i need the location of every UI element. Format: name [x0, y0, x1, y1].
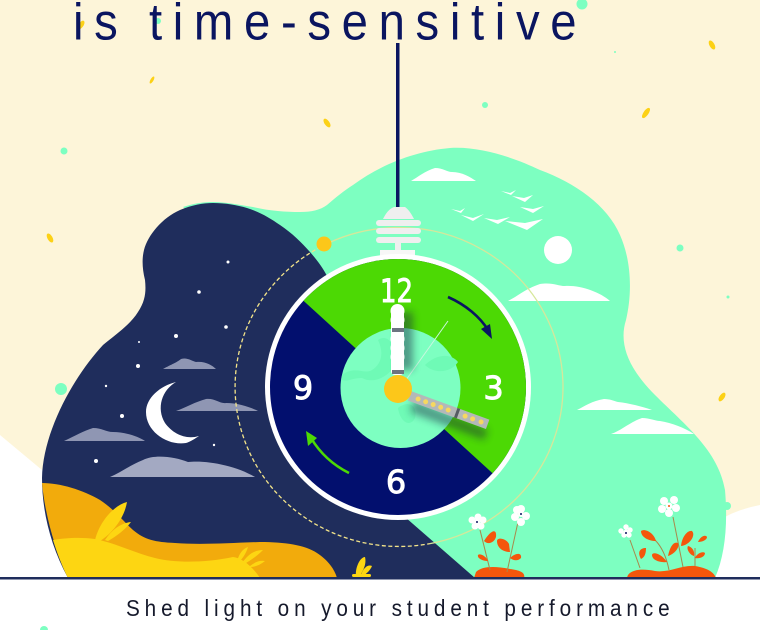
night blob — [42, 203, 475, 578]
orange hills — [42, 483, 337, 578]
night clouds — [64, 358, 258, 477]
pendulum cord — [396, 43, 400, 208]
minute hand LED strip — [390, 304, 404, 375]
numeral 6: 6 — [386, 463, 406, 501]
clockwise day arrow — [448, 297, 492, 339]
dashed orbit — [235, 228, 563, 546]
clock centre — [384, 375, 412, 403]
numeral 3: 3 — [483, 369, 504, 407]
hour hand LED strip — [408, 391, 489, 429]
left flowers — [468, 505, 530, 578]
day clouds, sun and birds — [411, 168, 694, 434]
yellow hills — [53, 538, 260, 578]
clock ring — [265, 254, 531, 520]
clock — [265, 255, 531, 520]
day blob — [183, 148, 726, 578]
tagline: Shed light on your student performance — [126, 595, 670, 621]
inner globe — [340, 328, 460, 448]
moon — [146, 382, 199, 443]
bulb socket — [376, 207, 421, 259]
numeral 9: 9 — [293, 369, 313, 407]
hand shadows — [398, 312, 488, 440]
right flowers — [618, 496, 716, 578]
ground line — [0, 577, 760, 580]
stars — [94, 260, 230, 463]
orbit sun — [316, 236, 332, 252]
night half of dial — [270, 259, 526, 515]
second hand — [406, 321, 448, 380]
yellow plants — [95, 502, 372, 577]
numeral 12: 12 — [380, 272, 413, 310]
clockwise night arrow — [306, 431, 349, 473]
globe continents — [342, 338, 458, 423]
day half of dial — [304, 259, 526, 474]
